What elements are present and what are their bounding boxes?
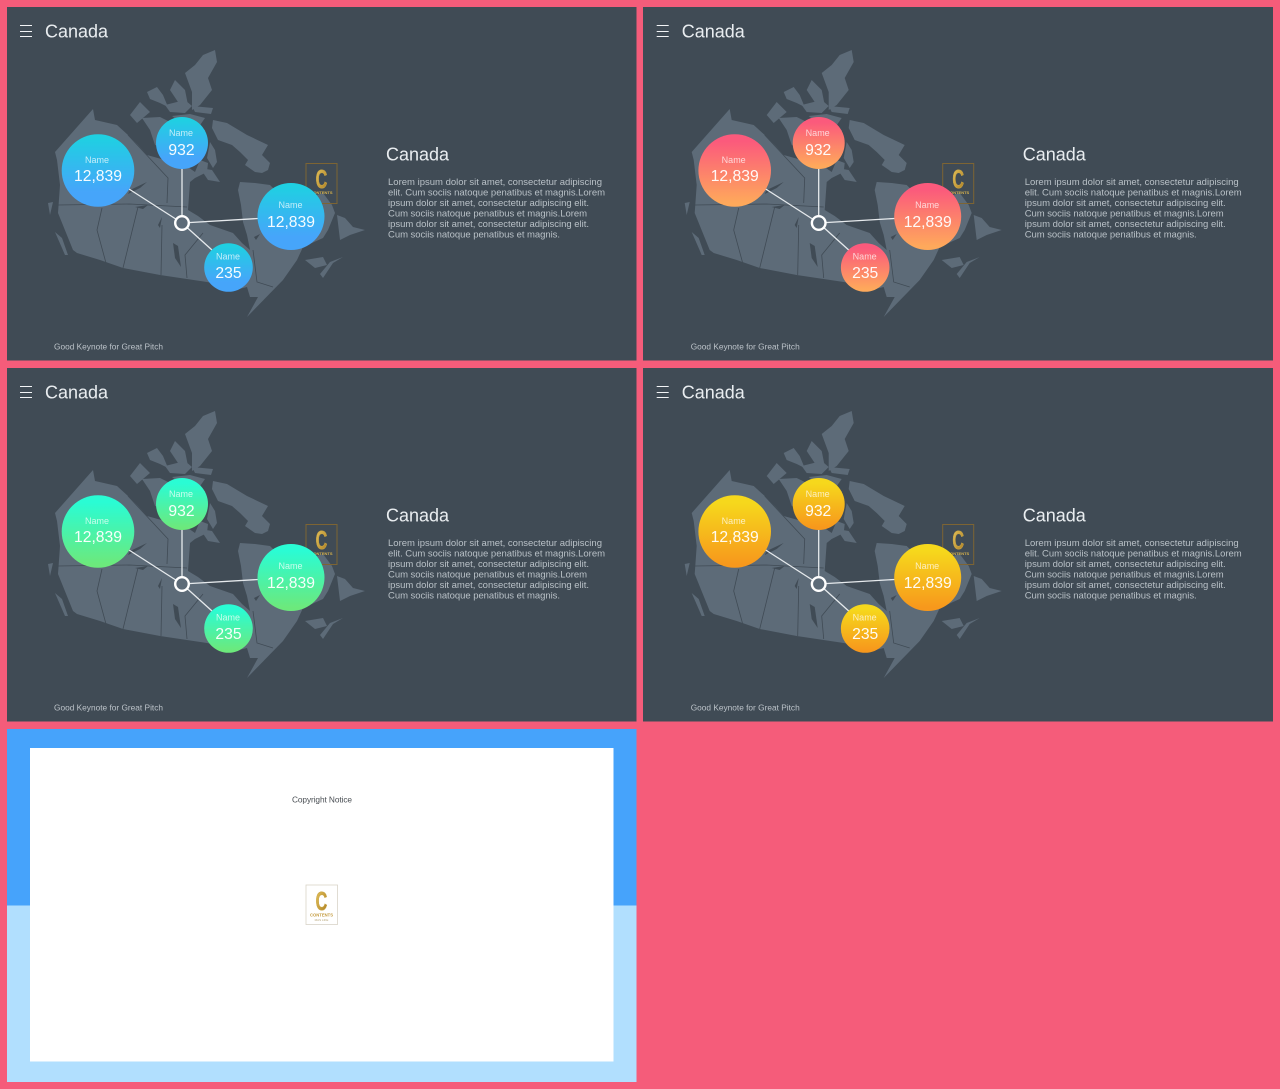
- bubble: west: 12,839: [74, 529, 122, 546]
- logo: CONTENTS: [947, 551, 970, 556]
- body text: [1025, 177, 1242, 240]
- logo: [943, 164, 974, 204]
- bubble: north: Name: [806, 489, 830, 499]
- bubble: east: Name: [915, 561, 939, 571]
- heading: Canada: [386, 506, 450, 526]
- body text: Lorem ipsum dolor sit amet, consectetur adipiscing: [388, 177, 602, 188]
- footer: Good Keynote for Great Pitch: [54, 342, 163, 352]
- bubble: north: 932: [805, 142, 831, 159]
- body text: Cum sociis natoque penatibus et magnis.: [388, 590, 560, 602]
- bubble: south: [841, 604, 890, 653]
- bubble: east: Name: [278, 561, 303, 571]
- bubble: west: Name: [85, 516, 109, 526]
- footer: Good Keynote for Great Pitch: [691, 702, 800, 712]
- bubble: south: [204, 604, 253, 653]
- connector lines: [766, 529, 895, 611]
- bubble: south: 235: [215, 626, 242, 643]
- hub node: [812, 577, 826, 591]
- bubble: north: [793, 117, 845, 169]
- bubble: east: 12,839: [267, 575, 315, 592]
- body text: Cum sociis natoque penatibus et magnis.: [1025, 590, 1197, 602]
- body text: ipsum dolor sit amet, consectetur adipiscing elit.: [388, 580, 589, 591]
- bubble: north: Name: [169, 489, 193, 499]
- logo: C: [316, 525, 328, 555]
- logo: CONTENTS: [947, 190, 970, 195]
- bubble: east: [894, 544, 961, 611]
- bubble: north: [156, 117, 208, 169]
- body text: Cum sociis natoque penatibus et magnis.Lorem: [1025, 208, 1224, 220]
- bubble: west: Name: [722, 155, 746, 165]
- bubble: east: Name: [278, 200, 303, 210]
- icon: menu: [657, 386, 669, 398]
- heading: Canada: [1023, 144, 1087, 164]
- body text: ipsum dolor sit amet, consectetur adipiscing elit.: [1025, 580, 1226, 591]
- body text: ipsum dolor sit amet, consectetur adipiscing elit.: [388, 559, 589, 570]
- logo: MAS LIKE: [315, 918, 328, 922]
- bubble: south: 235: [852, 265, 879, 282]
- body text: Lorem ipsum dolor sit amet, consectetur adipiscing: [388, 538, 602, 549]
- hub node: [812, 216, 826, 230]
- connector lines: [129, 529, 258, 611]
- logo: CONTENTS: [310, 551, 333, 556]
- bubble: east: 12,839: [267, 214, 315, 231]
- bubble: west: [698, 495, 771, 568]
- logo: CONTENTS: [310, 912, 333, 918]
- logo: C: [316, 886, 328, 916]
- body text: elit. Cum sociis natoque penatibus et magnis.Lorem: [388, 548, 605, 560]
- body text: Lorem ipsum dolor sit amet, consectetur adipiscing: [1025, 538, 1239, 549]
- bubble: north: 932: [168, 142, 195, 159]
- bubble: west: 12,839: [711, 529, 759, 546]
- body text: elit. Cum sociis natoque penatibus et magnis.Lorem: [388, 188, 605, 198]
- logo: CONTENTS: [310, 190, 333, 195]
- body text: Cum sociis natoque penatibus et magnis.Lorem: [388, 208, 587, 220]
- connector lines: [766, 168, 895, 250]
- map of Canada: [685, 411, 1002, 678]
- body text: Lorem ipsum dolor sit amet, consectetur adipiscing: [1025, 177, 1239, 188]
- bubble: south: Name: [853, 612, 877, 622]
- body text: Cum sociis natoque penatibus et magnis.: [1025, 230, 1197, 240]
- logo: C: [952, 525, 964, 555]
- title: Canada: [45, 382, 109, 402]
- title: Canada: [682, 382, 746, 402]
- bubble: east: [894, 183, 961, 250]
- bubble: south: Name: [216, 612, 240, 622]
- body text: Cum sociis natoque penatibus et magnis.Lorem: [388, 570, 587, 580]
- bubble: south: [841, 243, 890, 292]
- hub node: [175, 216, 189, 230]
- body text: ipsum dolor sit amet, consectetur adipiscing elit.: [1025, 219, 1226, 230]
- bubble: south: 235: [215, 265, 242, 282]
- bubble: west: 12,839: [74, 168, 122, 185]
- panel: blue slide: [7, 7, 636, 360]
- icon: menu: [20, 26, 32, 36]
- logo: [306, 524, 337, 564]
- panel: copyright slide: [7, 729, 636, 1082]
- footer: Good Keynote for Great Pitch: [691, 342, 800, 352]
- body text: ipsum dolor sit amet, consectetur adipiscing elit.: [388, 198, 589, 209]
- icon: menu: [20, 386, 32, 398]
- body text: ipsum dolor sit amet, consectetur adipiscing elit.: [388, 219, 589, 230]
- logo: [943, 524, 974, 564]
- bubble: north: [156, 478, 208, 530]
- body text: ipsum dolor sit amet, consectetur adipiscing elit.: [1025, 559, 1226, 570]
- bubble: south: [204, 243, 253, 292]
- body text: [1025, 538, 1242, 602]
- logo: C: [952, 164, 964, 194]
- heading: Canada: [386, 144, 450, 164]
- body text: ipsum dolor sit amet, consectetur adipiscing elit.: [1025, 198, 1226, 209]
- map of Canada: [48, 411, 365, 678]
- footer: Good Keynote for Great Pitch: [54, 702, 163, 712]
- panel: orange slide: [643, 368, 1273, 722]
- panel: pink slide: [643, 7, 1273, 360]
- bubble: west: [62, 134, 134, 207]
- body text: Cum sociis natoque penatibus et magnis.Lorem: [1025, 570, 1224, 580]
- bubble: east: 12,839: [904, 575, 952, 592]
- bubble: east: [258, 544, 324, 611]
- title: Canada: [45, 22, 109, 42]
- title: Canada: [682, 22, 746, 42]
- body text: [388, 538, 605, 602]
- logo: C: [316, 164, 328, 194]
- copyright notice: Copyright Notice: [292, 794, 352, 804]
- connector lines: [129, 168, 258, 250]
- bubble: north: Name: [806, 128, 830, 138]
- bubble: east: Name: [915, 200, 939, 210]
- logo: [306, 164, 337, 204]
- logo: [306, 885, 338, 924]
- body text: Cum sociis natoque penatibus et magnis.: [388, 230, 560, 240]
- bubble: west: [698, 134, 771, 207]
- panel: green slide: [7, 368, 636, 722]
- bubble: west: 12,839: [711, 168, 759, 185]
- body text: [388, 177, 605, 240]
- bubble: north: Name: [169, 128, 193, 138]
- bubble: south: 235: [852, 626, 879, 643]
- heading: Canada: [1023, 506, 1087, 526]
- map of Canada: [685, 50, 1002, 317]
- body text: elit. Cum sociis natoque penatibus et magnis.Lorem: [1025, 188, 1242, 198]
- map of Canada: [48, 50, 365, 317]
- bubble: north: 932: [805, 503, 831, 520]
- bubble: west: Name: [722, 516, 746, 526]
- bubble: west: Name: [85, 155, 109, 165]
- bubble: north: [793, 478, 845, 530]
- body text: elit. Cum sociis natoque penatibus et magnis.Lorem: [1025, 548, 1242, 560]
- bubble: east: 12,839: [904, 214, 952, 231]
- hub node: [175, 577, 189, 591]
- bubble: north: 932: [168, 503, 195, 520]
- bubble: south: Name: [853, 252, 877, 262]
- bubble: west: [62, 495, 134, 568]
- bubble: east: [258, 183, 324, 250]
- icon: menu: [657, 26, 669, 36]
- bubble: south: Name: [216, 252, 240, 262]
